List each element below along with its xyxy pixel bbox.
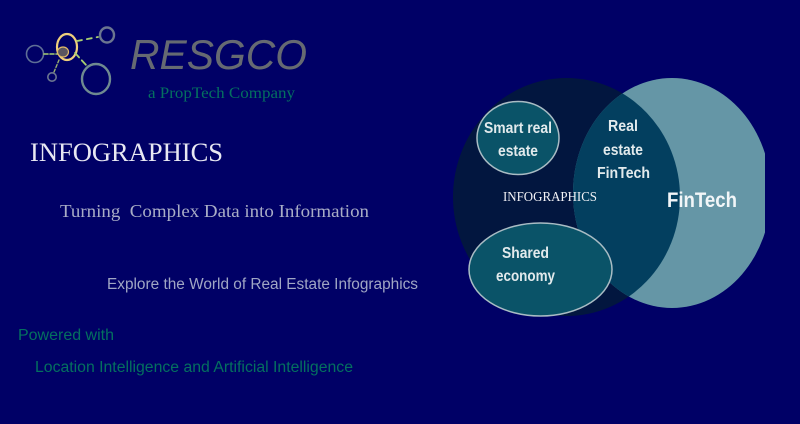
logo: RESGCO network icon xyxy=(26,28,114,94)
logo wordmark: RESGCO xyxy=(130,31,307,78)
location intelligence text: Location Intelligence and Artificial Intelligence xyxy=(35,359,353,376)
ellipse: smart real estate xyxy=(477,102,559,174)
circle: real estate xyxy=(453,78,680,316)
label: real estate fintech: FinTech xyxy=(597,165,650,182)
label: smart real estate: estate xyxy=(498,143,538,160)
title: INFOGRAPHICS xyxy=(30,138,223,167)
powered with text: Powered with xyxy=(18,327,114,344)
label: FinTech: FinTech xyxy=(667,189,737,212)
circle: FinTech xyxy=(573,78,771,308)
logo tagline: a PropTech Company xyxy=(148,85,295,102)
subtitle: Turning Complex Data into Information xyxy=(60,201,369,221)
explore text: Explore the World of Real Estate Infographics xyxy=(107,276,418,293)
label: shared economy: economy xyxy=(496,268,555,285)
overlap region xyxy=(573,94,680,296)
label: shared economy xyxy=(496,245,555,285)
label: real estate fintech xyxy=(597,118,650,182)
label: smart real estate: Smart real xyxy=(484,120,552,137)
label: infographics: INFOGRAPHICS xyxy=(503,190,597,205)
label: real estate fintech: Real xyxy=(608,118,638,135)
venn diagram xyxy=(453,78,771,316)
ellipse: shared economy xyxy=(469,223,612,316)
label: smart real estate xyxy=(484,120,552,160)
label: shared economy: Shared xyxy=(502,245,549,262)
infographic canvas xyxy=(19,26,765,376)
label: real estate fintech: estate xyxy=(603,142,643,159)
